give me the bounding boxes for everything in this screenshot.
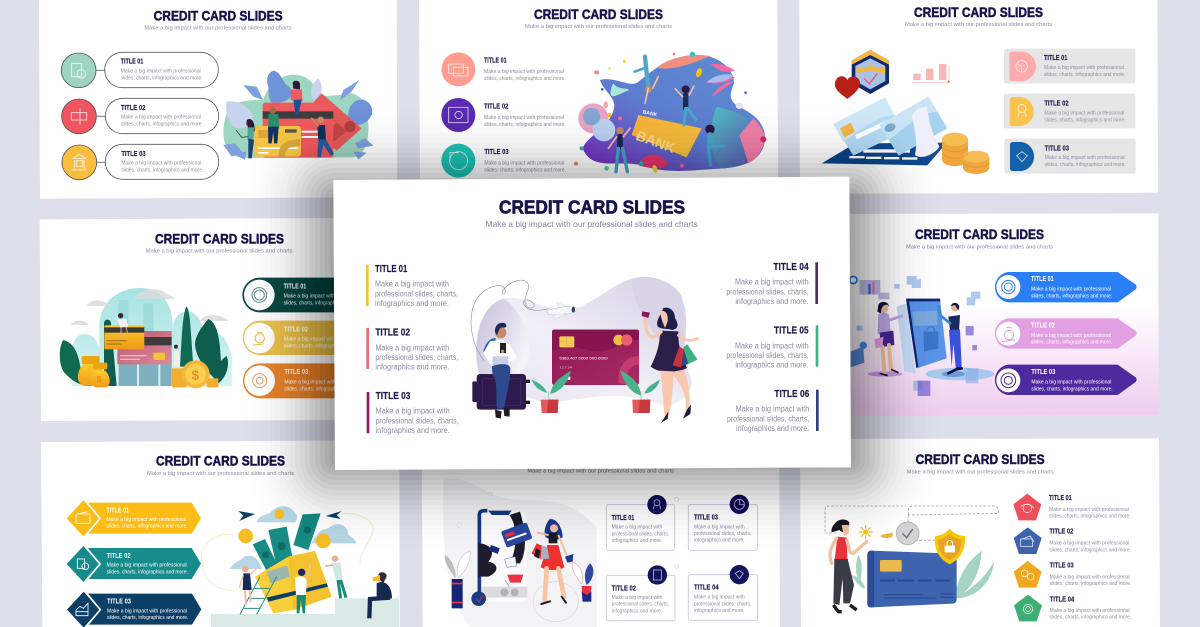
- column: titles 01 to 03: Make a big impact with: [375, 280, 449, 289]
- list: four pentagon items: Make a big impact with professional: [1049, 507, 1129, 513]
- heading: top left slide: [144, 9, 292, 32]
- grid: four outlined cards: professional slides, charts,: [612, 602, 669, 608]
- grid: four outlined cards: Make a big impact with: [694, 595, 745, 601]
- column: titles 01 to 03: professional slides, charts,: [376, 416, 459, 425]
- grid: four outlined cards: infographics and more.: [612, 609, 662, 615]
- soft shadow beneath the main slide: [245, 108, 940, 550]
- list: four pentagon items: TITLE 02: [1049, 529, 1073, 536]
- illustration: woman with blue card and shield: [825, 506, 998, 612]
- list: three flat circle items: Make a big impact with professional: [484, 69, 564, 75]
- bank card: BANK: [642, 109, 658, 118]
- grid: four outlined cards: professional slides, charts,: [694, 601, 751, 607]
- heading: top right slide: [905, 5, 1052, 28]
- list: four pentagon items: Make a big impact with professional: [1049, 541, 1129, 547]
- column: titles 01 to 03: TITLE 01: [375, 264, 408, 275]
- heading: top right slide: CREDIT CARD SLIDES: [914, 5, 1043, 20]
- illustration: money and team around yellow card: [202, 506, 399, 627]
- confetti: [574, 52, 766, 174]
- list: three pill items: TITLE 02: [284, 326, 308, 333]
- illustration: travellers and credit card: [471, 277, 698, 423]
- figure: person on top of card: [291, 81, 303, 115]
- man touching phone: [938, 303, 962, 373]
- bank card: BANK: [634, 127, 677, 156]
- list: three pill items: Make a big impact with professional: [284, 294, 364, 300]
- list: four pentagon items: TITLE 03: [1050, 562, 1074, 569]
- heading: top left slide: CREDIT CARD SLIDES: [154, 9, 283, 24]
- column: titles 04 to 06: TITLE 04: [773, 262, 809, 273]
- column: titles 01 to 03: [366, 264, 459, 435]
- heading: top centre slide: Make a big impact with our professional slides and charts: [525, 24, 672, 30]
- grid: four outlined cards: infographics and more.: [694, 608, 745, 614]
- list: three diamond arrows: Make a big impact with professional: [107, 563, 187, 569]
- illustration: shield, heart, cards and coins: [822, 50, 989, 174]
- leaves: [852, 551, 994, 598]
- list: four pentagon items: Make a big impact with professional: [1050, 574, 1130, 580]
- magenta credit card: [552, 330, 639, 385]
- list: three grey cards: TITLE 02: [1044, 100, 1069, 107]
- column: titles 01 to 03: TITLE 03: [376, 391, 411, 402]
- woman with shopping bags: [642, 308, 698, 423]
- column: titles 01 to 03: infographics and more.: [375, 299, 449, 308]
- figure: man on yellow card: [268, 107, 279, 143]
- list: three pill items: slides, charts, infographics and more.: [284, 343, 365, 349]
- grid: four outlined cards: professional slides, charts,: [612, 531, 669, 537]
- shield icon: [852, 50, 889, 94]
- list: three arrow banners: slides, charts, infographics and more.: [1031, 340, 1112, 346]
- heading: middle left slide: [146, 231, 293, 254]
- panel: main centre slide: [333, 177, 851, 470]
- list: three diamond arrows: TITLE 02: [107, 553, 131, 560]
- list: three flat circle items: slides, charts, infographics and more.: [484, 122, 566, 128]
- woman in red top: [830, 519, 867, 612]
- grid: four outlined cards: TITLE 03: [694, 515, 718, 522]
- list: three circle icons with pills: slides, charts, infographics and more.: [121, 75, 203, 81]
- heading: bottom left slide: CREDIT CARD SLIDES: [156, 454, 285, 469]
- coins: $: [192, 367, 200, 382]
- list: three arrow banners: TITLE 03: [1031, 369, 1055, 376]
- list: three pill items: TITLE 03: [284, 369, 308, 376]
- shield with padlock: [935, 529, 965, 564]
- blue credit card: [867, 551, 957, 607]
- list: three diamond arrows: TITLE 01: [106, 507, 129, 514]
- list: three arrow banners: slides, charts, infographics and more.: [1031, 293, 1112, 299]
- column: titles 01 to 03: Make a big impact with: [375, 343, 449, 352]
- list: three circle icons with pills: slides, charts, infographics and more.: [121, 167, 203, 173]
- list: four pentagon items: slides, charts, infographics and more.: [1049, 547, 1131, 553]
- panel: slide middle right, arrows on pink gradient: [850, 213, 1159, 416]
- list: four pentagon items: Make a big impact with professional: [1050, 608, 1130, 614]
- grid: four outlined cards: infographics and more.: [694, 538, 745, 544]
- illustration: phone with two people and floating cards: [850, 276, 994, 396]
- list: three flat circle items: TITLE 03: [484, 149, 509, 156]
- panel: slide bottom centre, outlined cards: [422, 468, 780, 627]
- list: three pill items: TITLE 01: [284, 284, 306, 291]
- grid: four outlined cards: TITLE 04: [694, 585, 719, 592]
- list: three arrow banners: Make a big impact with professional: [1031, 286, 1111, 292]
- heading: middle right slide: CREDIT CARD SLIDES: [915, 227, 1044, 242]
- subtitle: bottom centre slide: Make a big impact with our professional slides and charts: [527, 469, 674, 475]
- grid: four outlined cards: Make a big impact with: [612, 525, 662, 531]
- list: three circle icons with pills: Make a big impact with professional: [121, 69, 201, 75]
- list: three grey cards: slides, charts, infographics and more.: [1044, 72, 1125, 78]
- banknotes: [253, 513, 321, 571]
- list: three grey cards: slides, charts, infographics and more.: [1045, 162, 1126, 168]
- panel: slide bottom right, pentagon list: [800, 438, 1160, 627]
- list: three circle icons with pills: slides, charts, infographics and more.: [121, 121, 203, 127]
- list: three diamond arrows: TITLE 03: [107, 599, 131, 606]
- man with megaphone: [369, 572, 392, 618]
- column: titles 04 to 06: TITLE 05: [774, 325, 809, 336]
- list: three diamond arrows: slides, charts, infographics and more.: [107, 615, 188, 621]
- grid: four outlined cards: TITLE 01: [612, 515, 634, 522]
- column: titles 04 to 06: Make a big impact with: [735, 278, 809, 287]
- list: three grey cards: Make a big impact with professional: [1045, 155, 1125, 161]
- list: three grey cards: TITLE 01: [1044, 55, 1067, 62]
- coins: [172, 360, 218, 388]
- phone outline: [471, 511, 527, 606]
- list: three flat circle items: [441, 52, 566, 178]
- person pushing card: [325, 555, 346, 598]
- list: three pill items: Make a big impact with professional: [284, 337, 364, 343]
- heading: main slide title and subtitle: [486, 197, 698, 229]
- heading: middle left slide: CREDIT CARD SLIDES: [155, 231, 284, 246]
- column: titles 01 to 03: TITLE 02: [375, 327, 410, 338]
- small floating leaf: [880, 532, 893, 538]
- sun spark: [859, 526, 872, 538]
- list: three grey cards: TITLE 03: [1045, 145, 1069, 152]
- plants: [445, 551, 593, 608]
- credit cards: [104, 325, 172, 364]
- column: titles 04 to 06: infographics and more.: [735, 297, 809, 306]
- column: titles 04 to 06: Make a big impact with: [736, 405, 809, 414]
- column: titles 04 to 06: professional slides, charts,: [727, 414, 809, 423]
- illustration: colourful blob with bank card and people: [574, 52, 766, 174]
- column: titles 01 to 03: Make a big impact with: [376, 407, 450, 416]
- list: three arrow banners: Make a big impact with professional: [1031, 333, 1111, 339]
- list: three flat circle items: Make a big impact with professional: [484, 161, 564, 167]
- mini bar chart: [912, 64, 950, 83]
- shopper woman: [532, 519, 573, 604]
- column: titles 04 to 06: infographics and more.: [736, 424, 809, 433]
- shopping basket and gifts: [489, 545, 523, 587]
- list: three diamond arrows: slides, charts, infographics and more.: [106, 524, 188, 530]
- column: titles 01 to 03: infographics and more.: [376, 426, 450, 435]
- heading: top left slide: Make a big impact with our professional slides and charts: [144, 26, 292, 32]
- grid: four outlined cards: Make a big impact with: [694, 524, 745, 530]
- heading: middle right slide: Make a big impact with our professional slides and charts: [906, 244, 1053, 250]
- small blue card: [501, 522, 533, 548]
- grid: four outlined cards: [606, 495, 758, 621]
- list: four pentagon items: slides, charts, infographics and more.: [1049, 514, 1131, 520]
- magenta credit card: 12 / 24: [559, 365, 572, 369]
- ladder: [240, 577, 277, 614]
- list: three flat circle items: TITLE 01: [484, 58, 507, 65]
- list: three circle icons with pills: [61, 52, 219, 180]
- illustration: phone, shopper and plants: [445, 492, 679, 622]
- panel: slide top centre, flat circles and colourful blob: [419, 0, 778, 179]
- list: three diamond arrows: [67, 500, 201, 627]
- grid: four outlined cards: infographics and more.: [612, 538, 662, 544]
- phone: [906, 299, 947, 368]
- list: three flat circle items: TITLE 02: [484, 104, 508, 111]
- yellow card: [255, 551, 332, 613]
- panel: slide top left, circles and pills: [39, 0, 397, 199]
- list: three diamond arrows: Make a big impact with professional: [106, 517, 186, 523]
- list: three pill items: slides, charts, infographics and more.: [284, 301, 365, 307]
- list: three circle icons with pills: TITLE 03: [121, 151, 146, 158]
- list: four pentagon items: slides, charts, infographics and more.: [1050, 615, 1131, 621]
- illustration: cards, coins, money bags and plants: [60, 288, 232, 388]
- list: three arrow banners: [995, 272, 1137, 395]
- heart icon: [835, 76, 860, 99]
- airplane: [547, 302, 578, 320]
- list: three arrow banners: TITLE 01: [1031, 276, 1054, 283]
- person in front of card: [295, 563, 311, 613]
- list: three circle icons with pills: Make a big impact with professional: [121, 115, 201, 121]
- list: three diamond arrows: slides, charts, infographics and more.: [107, 569, 188, 575]
- column: titles 01 to 03: professional slides, charts,: [375, 353, 458, 362]
- list: four pentagon items: [1013, 494, 1131, 621]
- magenta credit card: 5383 407 0000 000-0009: [559, 357, 608, 361]
- list: four pentagon items: slides, charts, infographics and more.: [1050, 581, 1131, 587]
- gold coin stacks: [942, 133, 989, 174]
- panel: slide bottom left, hexagon arrows: [41, 440, 400, 627]
- column: titles 04 to 06: professional slides, charts,: [726, 351, 809, 360]
- heading: top centre slide: [525, 7, 672, 30]
- grid: four outlined cards: Make a big impact with: [612, 595, 662, 601]
- pale blue cards: [833, 97, 903, 156]
- column: titles 01 to 03: infographics and more.: [375, 363, 449, 372]
- heading: bottom right slide: Make a big impact with our professional slides and charts: [907, 469, 1054, 475]
- column: titles 04 to 06: professional slides, charts,: [726, 287, 809, 296]
- heading: top centre slide: CREDIT CARD SLIDES: [534, 7, 663, 22]
- heading: bottom left slide: [147, 454, 294, 477]
- heading: bottom right slide: [907, 452, 1054, 475]
- list: three pill items: [242, 278, 366, 398]
- list: three flat circle items: Make a big impact with professional: [484, 115, 564, 121]
- list: three circle icons with pills: TITLE 02: [121, 105, 145, 112]
- list: three grey cards: Make a big impact with professional: [1044, 65, 1124, 71]
- list: three flat circle items: slides, charts, infographics and more.: [484, 76, 566, 82]
- list: three grey cards: slides, charts, infographics and more.: [1044, 117, 1126, 123]
- grid: four outlined cards: professional slides, charts,: [694, 531, 751, 537]
- list: four pentagon items: TITLE 01: [1049, 495, 1072, 502]
- list: three diamond arrows: Make a big impact with professional: [107, 608, 187, 614]
- list: three grey cards: Make a big impact with professional: [1044, 110, 1124, 116]
- illustration: people on credit cards: [223, 71, 373, 160]
- column: titles 04 to 06: [726, 262, 819, 433]
- column: titles 04 to 06: Make a big impact with: [735, 341, 809, 350]
- panel: slide top right, grey cards with D shapes: [799, 0, 1158, 194]
- tiny figures: [117, 313, 180, 367]
- flight path: [471, 280, 548, 361]
- list: three grey cards: [1004, 49, 1136, 174]
- column: titles 01 to 03: professional slides, charts,: [375, 289, 458, 298]
- heading: bottom left slide: Make a big impact with our professional slides and charts: [147, 471, 294, 477]
- list: three arrow banners: TITLE 02: [1031, 322, 1055, 329]
- grid: four outlined cards: TITLE 02: [612, 585, 636, 592]
- heading: main slide title and subtitle: CREDIT CARD SLIDES: [499, 197, 685, 218]
- lavender blob: [476, 277, 692, 407]
- bank card: [632, 109, 702, 157]
- heading: middle right slide: [906, 227, 1053, 250]
- woman on ladder: [239, 566, 257, 605]
- woman with pink folder: [874, 302, 902, 376]
- check mark circle: [896, 522, 919, 545]
- heading: middle left slide: Make a big impact with our professional slides and charts: [146, 248, 293, 254]
- heading: main slide title and subtitle: Make a big impact with our professional slides and charts: [486, 219, 698, 229]
- heading: top right slide: Make a big impact with our professional slides and charts: [905, 22, 1052, 28]
- list: three circle icons with pills: Make a big impact with professional: [121, 161, 201, 167]
- money bags: $: [97, 374, 102, 384]
- heading: bottom right slide: CREDIT CARD SLIDES: [916, 452, 1045, 467]
- list: three circle icons with pills: TITLE 01: [121, 59, 143, 66]
- list: three arrow banners: Make a big impact with professional: [1031, 379, 1111, 385]
- list: four pentagon items: TITLE 04: [1050, 596, 1074, 603]
- money bags: [78, 356, 110, 387]
- figure: woman with red card: [312, 117, 334, 157]
- man sitting on suitcase: [472, 323, 530, 419]
- panel: slide middle left, pill list with city cards: [40, 218, 366, 421]
- plants with red pots: [532, 370, 660, 413]
- list: three pill items: slides, charts, infographics and more.: [284, 386, 366, 392]
- column: titles 04 to 06: TITLE 06: [774, 389, 810, 400]
- dancing people: [608, 57, 723, 172]
- list: three flat circle items: slides, charts, infographics and more.: [484, 168, 566, 174]
- figure: woman with laptop: [236, 119, 255, 158]
- list: three pill items: Make a big impact with professional: [284, 379, 364, 385]
- column: titles 04 to 06: infographics and more.: [735, 361, 809, 370]
- keyboard base: [822, 143, 947, 165]
- list: three arrow banners: slides, charts, infographics and more.: [1031, 386, 1113, 392]
